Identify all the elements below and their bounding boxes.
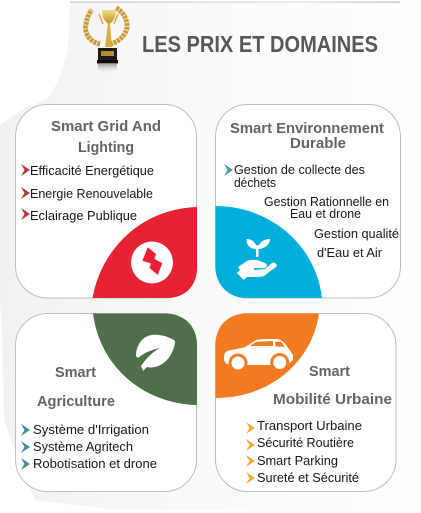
heading: Smart Grid And [51,118,161,135]
heading: Lighting [78,139,134,156]
heading [273,363,392,408]
icon: trophy [86,8,127,74]
panel: smart grid and lighting [16,104,197,298]
list: Sureté et Sécurité [257,471,359,485]
heading [230,120,384,152]
heading [51,118,161,156]
red quarter shape [92,207,197,298]
list [224,163,399,260]
title: LES PRIX ET DOMAINES [142,31,378,57]
heading: Mobilité Urbaine [273,391,392,408]
list [246,419,362,485]
heading [37,364,115,410]
icon: leaf [136,335,175,371]
list: Transport Urbaine [257,419,362,433]
heading: Smart [309,363,350,380]
list: d'Eau et Air [317,246,382,260]
list: Gestion qualité [314,227,399,241]
panel: smart mobilite urbaine [216,314,396,492]
green quarter shape [93,314,197,405]
list: Efficacité Energétique [30,164,154,178]
icon: lightning bolt [131,242,173,284]
panel: smart environnement durable [216,104,400,298]
heading: Durable [290,135,346,152]
icon: car [224,339,293,372]
list: Gestion de collecte des [234,163,365,177]
icon: plant in hand [237,239,277,280]
heading: Smart Environnement [230,120,384,137]
list: Système d'Irrigation [33,423,149,437]
heading: Agriculture [37,393,115,410]
list: Eau et drone [290,207,361,221]
heading: Smart [55,364,96,381]
list: Système Agritech [33,440,133,454]
list: Energie Renouvelable [30,187,153,201]
list: Sécurité Routière [257,436,354,450]
list: Gestion Rationnelle en [264,195,389,209]
panel: smart agriculture [16,314,197,492]
blue quarter shape [216,206,322,298]
orange quarter shape [216,314,319,398]
list: Robotisation et drone [33,457,157,471]
list [21,164,154,223]
list: déchets [234,176,276,190]
list: Smart Parking [257,454,338,468]
list [21,423,157,471]
list: Eclairage Publique [30,209,137,223]
